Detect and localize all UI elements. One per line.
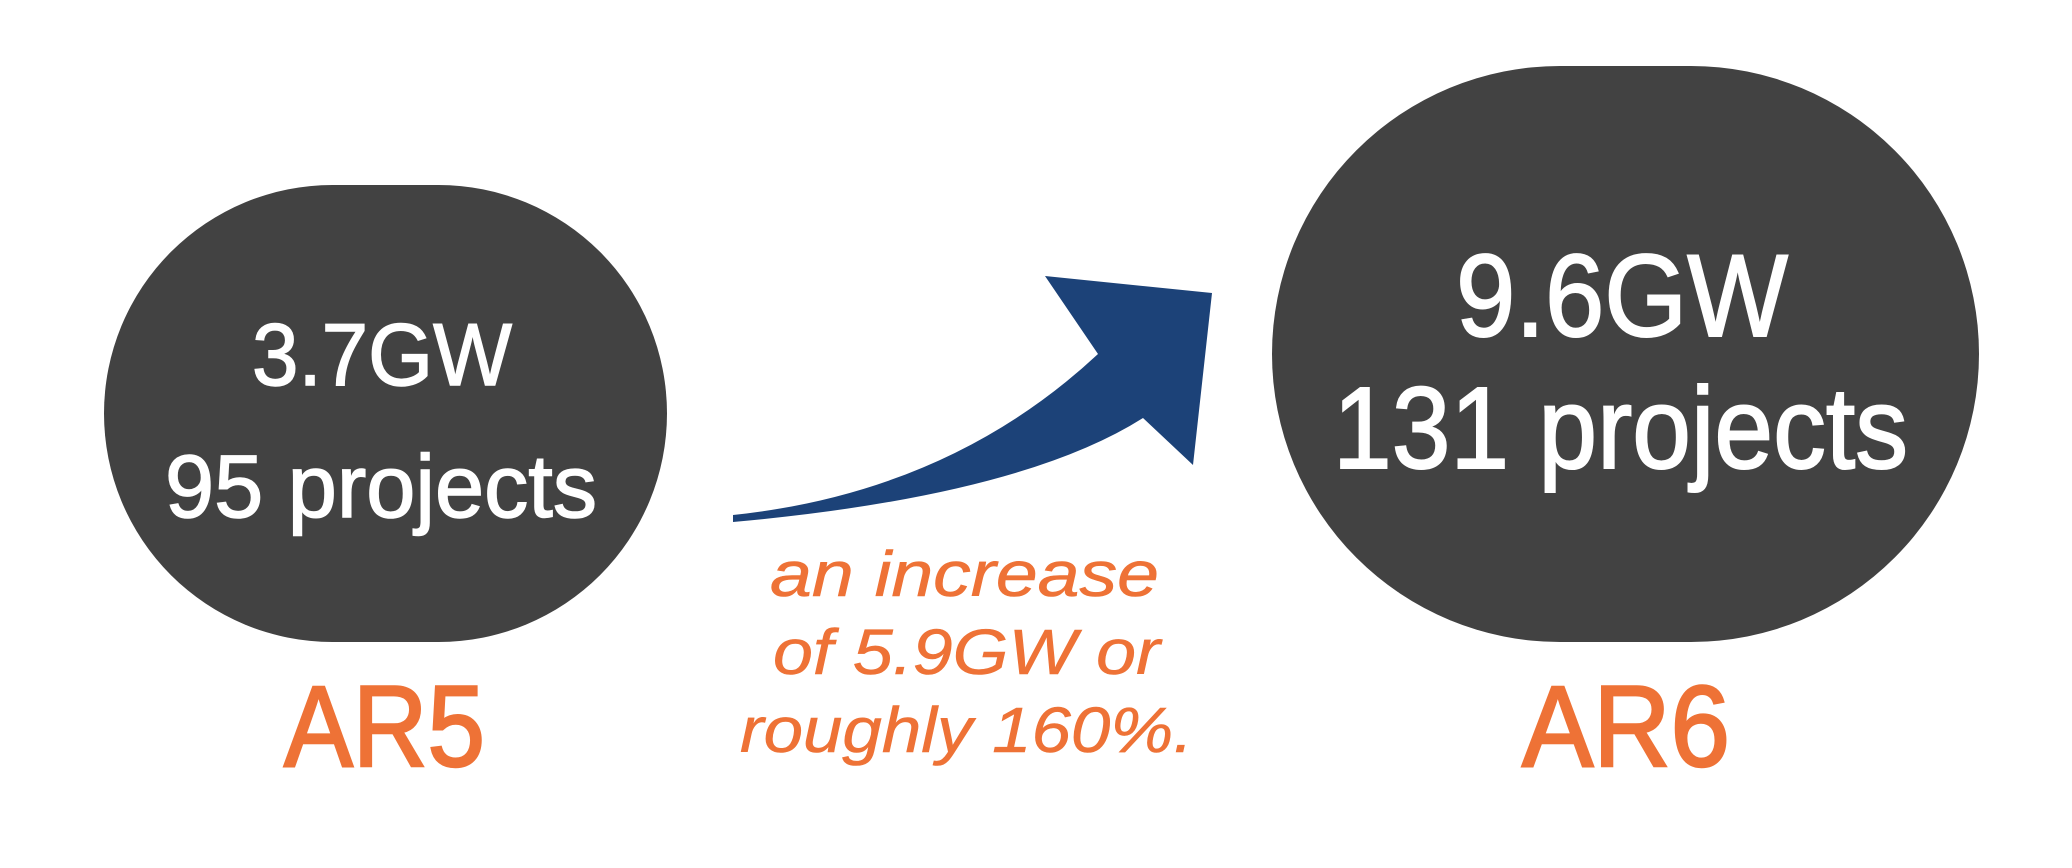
AR5 capacity value: 3.7GW (252, 305, 512, 404)
AR6 project count: 131 projects (1333, 363, 1908, 493)
heading: AR5: AR5 (284, 663, 485, 791)
panel: AR6 capacity shape (1272, 66, 1979, 642)
arrow: increase from AR5 to AR6 (733, 276, 1212, 522)
heading: AR6: AR6 (1522, 663, 1730, 791)
callout: size of increase (740, 538, 1193, 766)
panel: AR5 capacity shape (104, 185, 667, 642)
AR5 project count: 95 projects (165, 436, 597, 536)
callout line 1: an increase (770, 538, 1159, 610)
callout line 3: roughly 160%. (740, 694, 1193, 766)
AR5 rounded shape (104, 185, 667, 642)
AR6 rounded shape (1272, 66, 1979, 642)
AR6 capacity value: 9.6GW (1456, 230, 1789, 361)
callout line 2: of 5.9GW or (773, 616, 1163, 688)
